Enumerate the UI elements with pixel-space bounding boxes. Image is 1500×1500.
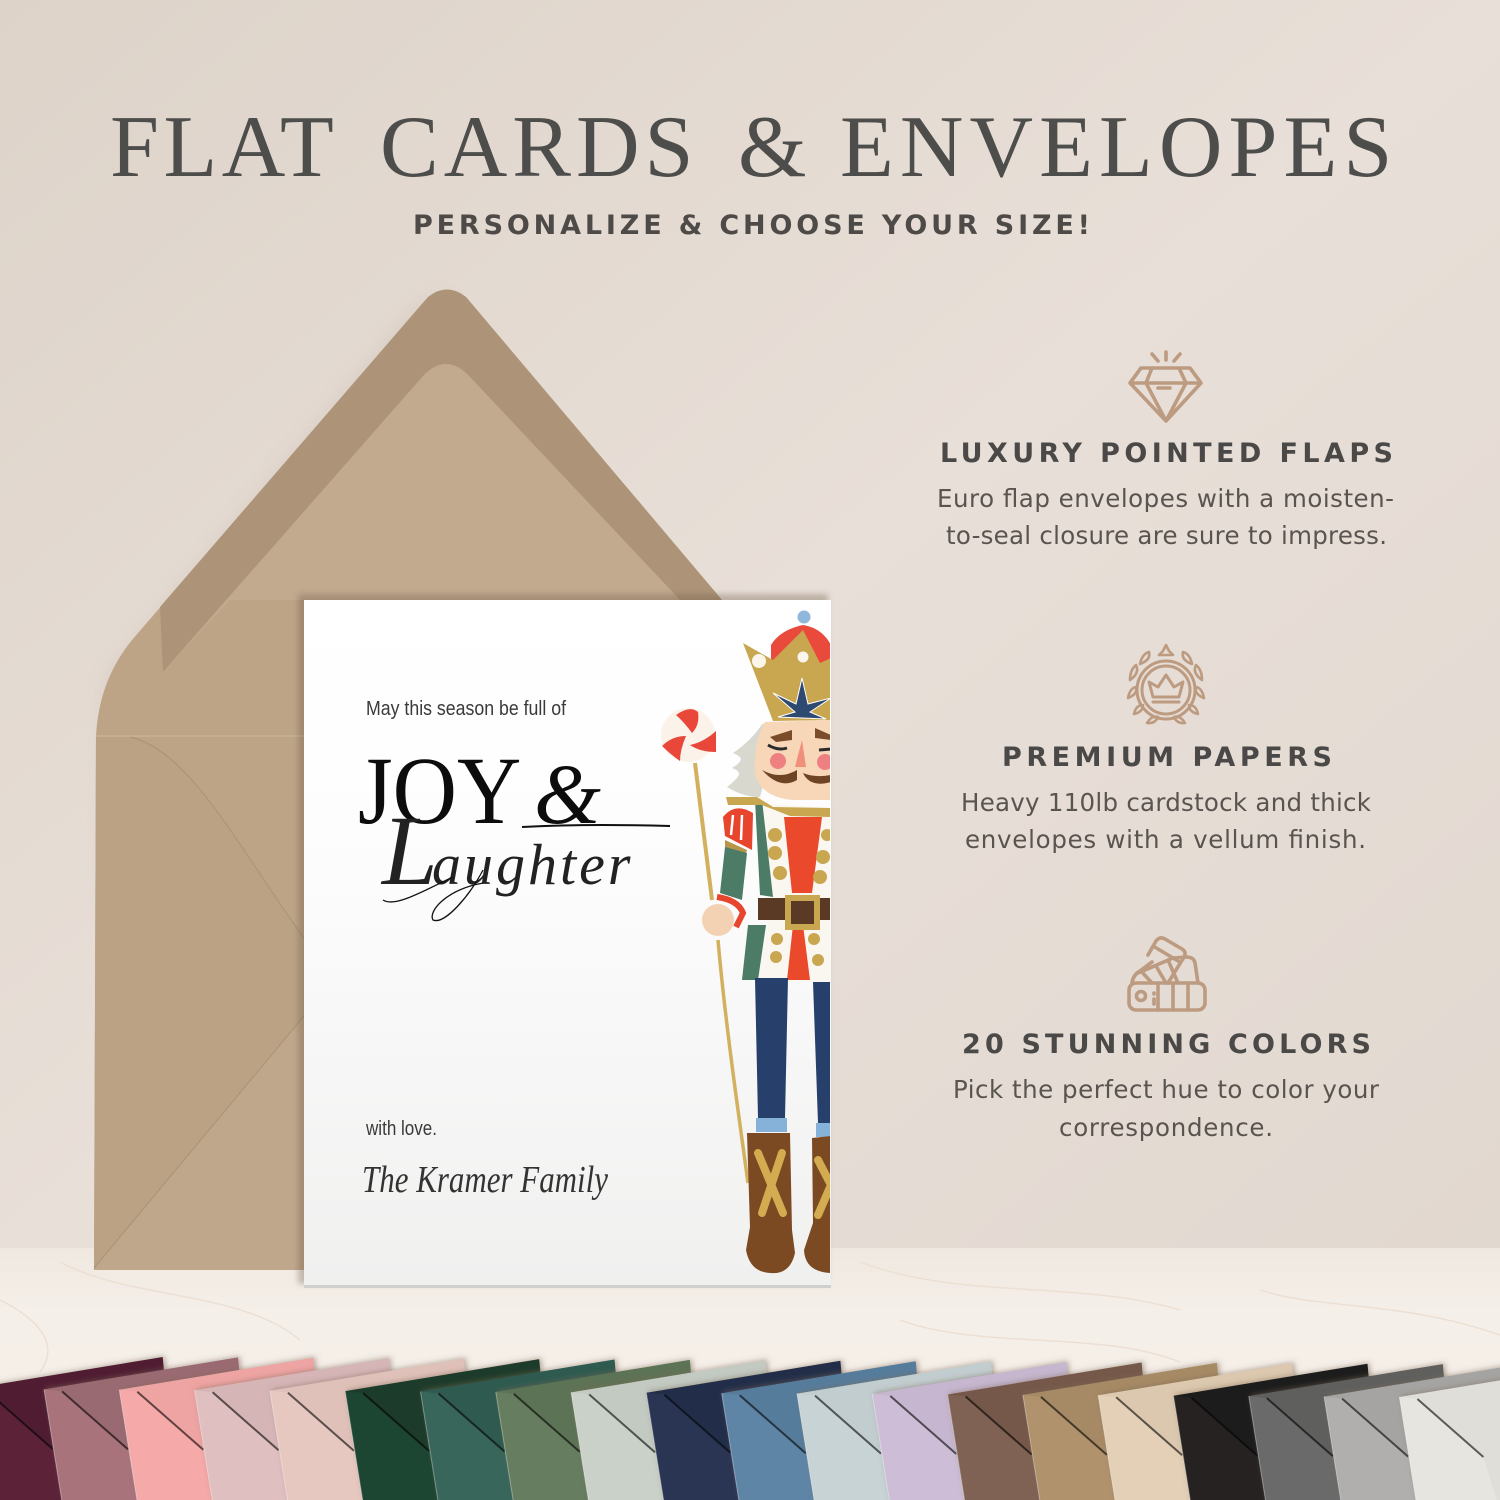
icon: diamond — [1130, 352, 1201, 421]
feature heading: 20 stunning colors: 20 STUNNING COLORS — [962, 1029, 1371, 1060]
title: ENVELOPES — [840, 99, 1398, 196]
card line: family signature: The Kramer Family — [362, 1159, 608, 1201]
envelope body — [94, 735, 320, 1270]
feature text: 20 stunning colors: Pick the perfect hue to color your — [953, 1075, 1380, 1104]
card shadow — [298, 594, 828, 1284]
envelope liner — [163, 364, 680, 672]
marble floor — [0, 1248, 1500, 1500]
feature heading: luxury pointed flaps: LUXURY POINTED FLAPS — [940, 438, 1393, 469]
feature text: luxury pointed flaps: to-seal closure are sure to impress. — [946, 521, 1387, 550]
title: CARDS — [380, 99, 698, 196]
card headline: joy and laughter: JOY — [358, 737, 519, 844]
envelope flap — [96, 290, 722, 737]
face — [755, 720, 833, 800]
hand and cuff — [702, 897, 743, 936]
illustration: nutcracker — [661, 610, 833, 1273]
card headline: joy and laughter: L — [380, 795, 438, 906]
title: & — [738, 99, 806, 196]
jacket — [720, 797, 833, 982]
legs — [755, 978, 831, 1137]
icon: color fan — [1129, 938, 1205, 1010]
envelope left pocket — [94, 737, 304, 1268]
card headline: joy and laughter: & — [534, 746, 601, 842]
feature text: 20 stunning colors: correspondence. — [1059, 1113, 1273, 1142]
feature text: luxury pointed flaps: Euro flap envelopes with a moisten- — [937, 484, 1394, 513]
title: FLAT — [110, 99, 338, 196]
hat — [743, 610, 831, 721]
feature text: premium papers: envelopes with a vellum finish. — [965, 825, 1366, 854]
envelope — [94, 290, 722, 1270]
feature text: premium papers: Heavy 110lb cardstock and thick — [961, 788, 1372, 817]
envelope shadow on wall — [110, 300, 447, 900]
envelope color swatches — [0, 1357, 1500, 1500]
boots — [746, 1133, 831, 1273]
subtitle: PERSONALIZE & CHOOSE YOUR SIZE! — [413, 210, 1090, 241]
card line: greeting: May this season be full of — [366, 698, 566, 720]
card headline: joy and laughter: aughter — [432, 832, 633, 897]
hair — [727, 723, 764, 797]
feature heading: premium papers: PREMIUM PAPERS — [1002, 742, 1332, 773]
icon: crown badge — [1128, 645, 1204, 723]
envelope flap band — [160, 290, 722, 672]
greeting card — [304, 600, 833, 1288]
envelope bottom pocket — [94, 1016, 320, 1270]
scepter — [661, 708, 748, 1183]
card line: sign-off: with love. — [365, 1118, 437, 1140]
card headline: joy and laughter — [358, 737, 670, 921]
